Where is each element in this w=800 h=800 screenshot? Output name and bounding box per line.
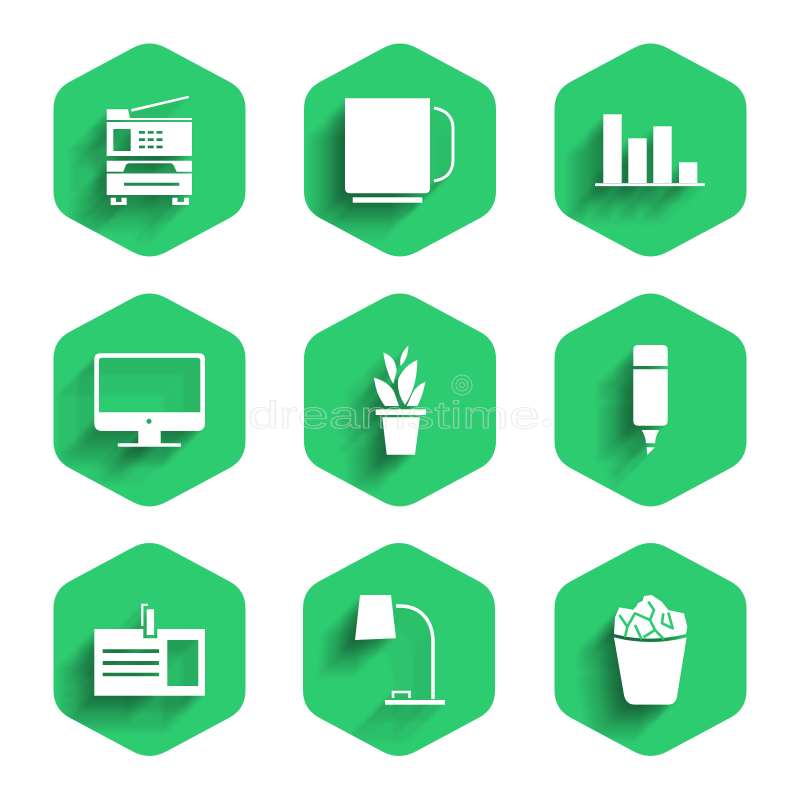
- icon: bar chart: [595, 114, 705, 186]
- icon: desk lamp: [355, 595, 445, 705]
- hexagon: paper bin: [554, 543, 746, 756]
- panel: potted plant: [304, 294, 496, 506]
- long shadow: id badge: [94, 605, 205, 696]
- panel: monitor: [54, 294, 246, 506]
- hexagon: monitor: [54, 294, 246, 506]
- hexagon: desk lamp: [303, 543, 495, 756]
- panel: copier: [54, 44, 246, 256]
- watermark: [248, 375, 551, 437]
- icon: id badge: [94, 605, 205, 696]
- hexagon: mug: [304, 44, 496, 256]
- panel: bar chart: [554, 44, 746, 256]
- long shadow: highlighter marker: [633, 345, 668, 455]
- long shadow: bar chart: [595, 114, 705, 186]
- panel: id badge: [54, 543, 246, 756]
- hexagon: id badge: [54, 543, 246, 756]
- panel: desk lamp: [303, 543, 495, 756]
- panel: mug: [304, 44, 496, 256]
- long shadow: paper bin: [614, 595, 687, 705]
- long shadow: mug: [345, 98, 453, 203]
- hexagon: highlighter marker: [554, 294, 746, 506]
- hexagon: potted plant: [304, 294, 496, 506]
- watermark: dreamstime: [248, 395, 540, 437]
- long shadow: potted plant: [374, 346, 426, 455]
- long shadow: desk lamp: [355, 595, 445, 705]
- icon: potted plant: [374, 346, 426, 455]
- hexagon: copier: [54, 44, 246, 256]
- panel: paper bin: [554, 543, 746, 756]
- icon: highlighter marker: [633, 345, 668, 455]
- long shadow: copier: [107, 96, 192, 205]
- icon: mug: [345, 98, 453, 203]
- icon: copier: [107, 96, 192, 205]
- panel: highlighter marker: [554, 294, 746, 506]
- icon: monitor: [94, 353, 205, 447]
- icon: paper bin: [614, 595, 687, 705]
- long shadow: monitor: [94, 353, 205, 447]
- hexagon: bar chart: [554, 44, 746, 256]
